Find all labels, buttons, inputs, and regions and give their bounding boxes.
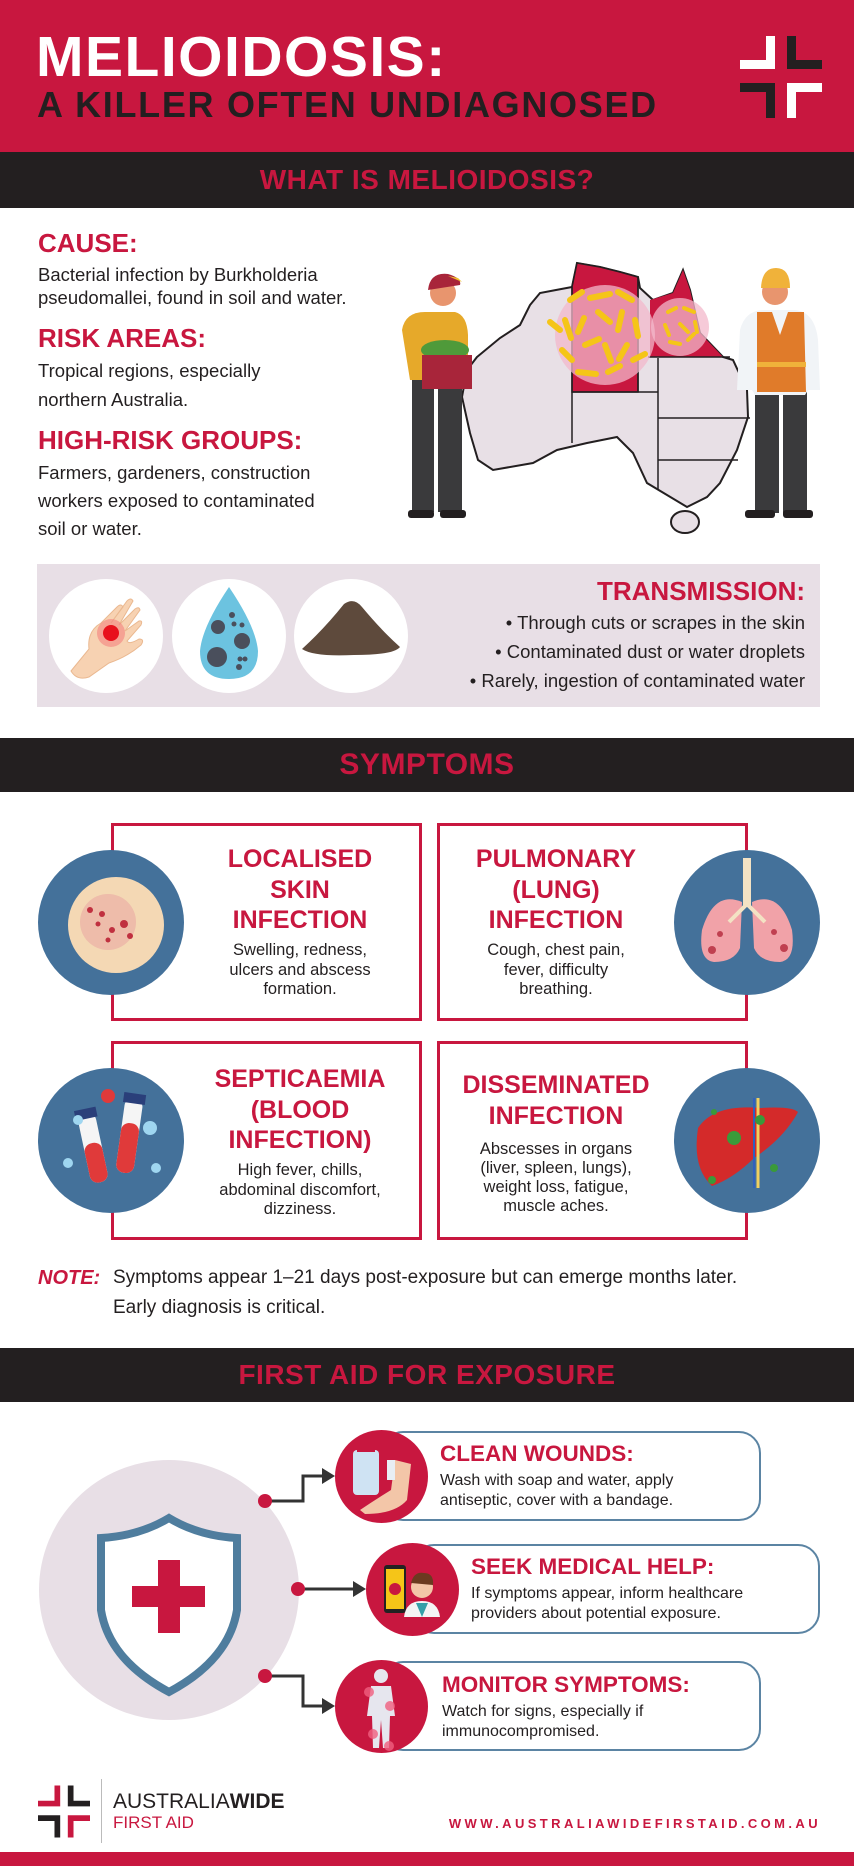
text: seek medical help: SEEK MEDICAL HELP:: [471, 1554, 714, 1579]
text: localised skin infection: SKIN: [270, 876, 330, 904]
text: pulmonary infection: PULMONARY: [476, 845, 636, 873]
icon: doctor and phone: [366, 1543, 459, 1636]
panel: disseminated infection: [437, 1041, 748, 1240]
icon: water drop with bacteria: [172, 579, 286, 693]
text: septicaemia: [215, 1065, 385, 1218]
text: septicaemia: High fever, chills,: [238, 1161, 362, 1179]
icon: soil pile: [294, 579, 408, 693]
text: clean wounds: CLEAN WOUNDS:: [440, 1441, 634, 1466]
bullet list: [470, 612, 805, 691]
icon: skin: [38, 850, 184, 995]
text: disseminated infection: INFECTION: [489, 1102, 623, 1130]
text: localised skin infection: [228, 845, 372, 998]
section heading: what is melioidosis: WHAT IS MELIOIDOSIS?: [260, 164, 594, 195]
text: disseminated infection: muscle aches.: [503, 1197, 609, 1215]
bottom bar: [0, 1852, 854, 1866]
text block: risk areas: northern Australia.: [38, 389, 188, 410]
icon: liver: [674, 1068, 820, 1213]
step card: clean wounds: [381, 1431, 761, 1521]
panel: localised skin infection: [111, 823, 422, 1021]
text: localised skin infection: LOCALISED: [228, 845, 372, 873]
panel: pulmonary infection: [437, 823, 748, 1021]
text: monitor symptoms: immunocompromised.: [442, 1722, 599, 1740]
icon: lungs: [674, 850, 820, 995]
text: pulmonary infection: [476, 845, 636, 998]
text block: high-risk groups: HIGH-RISK GROUPS:: [38, 425, 302, 455]
panel: transmission: [37, 564, 820, 707]
icon: wound care: [335, 1430, 428, 1523]
illustration: map of Australia with workers: [402, 262, 820, 534]
text: pulmonary infection: Cough, chest pain,: [487, 941, 625, 959]
text: septicaemia: INFECTION): [228, 1126, 372, 1154]
heading: transmission: TRANSMISSION:: [597, 576, 805, 606]
footer logo: AUSTRALIAWIDE: [113, 1790, 285, 1813]
text: localised skin infection: ulcers and abscess: [229, 960, 371, 978]
section heading: symptoms: [0, 738, 854, 792]
text: seek medical help: providers about potential exposure.: [471, 1604, 721, 1622]
section heading: what is melioidosis: [0, 152, 854, 208]
text: localised skin infection: Swelling, redness,: [233, 941, 367, 959]
note: [38, 1267, 737, 1318]
arrows connecting shield to steps: [258, 1468, 366, 1714]
text block: high-risk groups: soil or water.: [38, 518, 142, 539]
construction worker: [737, 268, 820, 518]
text: pulmonary infection: fever, difficulty: [504, 960, 608, 978]
text: septicaemia: SEPTICAEMIA: [215, 1065, 385, 1093]
footer logo: [38, 1779, 285, 1843]
text block: risk areas: Tropical regions, especially: [38, 360, 260, 381]
bullet list: • Rarely, ingestion of contaminated water: [470, 670, 805, 691]
text: disseminated infection: (liver, spleen, lungs),: [480, 1159, 632, 1177]
header banner: [0, 0, 854, 152]
text: monitor symptoms: MONITOR SYMPTOMS:: [442, 1672, 690, 1697]
text: septicaemia: (BLOOD: [251, 1096, 349, 1124]
text: seek medical help: [471, 1554, 743, 1622]
text: pulmonary infection: INFECTION: [489, 906, 623, 934]
step card: monitor symptoms: [381, 1661, 761, 1751]
logo mark: [740, 36, 822, 118]
text: disseminated infection: weight loss, fatigue,: [484, 1178, 628, 1196]
text: septicaemia: abdominal discomfort,: [219, 1180, 381, 1198]
text: disseminated infection: Abscesses in organs: [480, 1140, 632, 1158]
section heading: first aid for exposure: [0, 1348, 854, 1402]
text block: risk areas: RISK AREAS:: [38, 323, 206, 353]
text block: risk areas: [38, 323, 260, 410]
text: monitor symptoms: [442, 1672, 690, 1740]
text: clean wounds: antiseptic, cover with a bandage.: [440, 1492, 673, 1508]
note: Early diagnosis is critical.: [113, 1297, 325, 1318]
map: [462, 263, 750, 533]
note: NOTE:: [38, 1267, 100, 1289]
subtitle: A KILLER OFTEN UNDIAGNOSED: [37, 84, 658, 125]
text: disseminated infection: DISSEMINATED: [462, 1071, 650, 1099]
text block: cause: CAUSE:: [38, 228, 138, 258]
panel: septicaemia: [111, 1041, 422, 1240]
text: localised skin infection: formation.: [263, 980, 337, 998]
section heading: first aid for exposure: FIRST AID FOR EXPOSURE: [238, 1359, 616, 1390]
title: MELIOIDOSIS:: [36, 25, 447, 89]
farmer: [402, 274, 472, 518]
text: clean wounds: [440, 1441, 674, 1508]
text block: cause: Bacterial infection by Burkholderia: [38, 264, 318, 285]
section heading: symptoms: SYMPTOMS: [339, 748, 515, 781]
text block: high-risk groups: workers exposed to contaminated: [38, 490, 315, 511]
bullet list: • Contaminated dust or water droplets: [495, 641, 805, 662]
step card: seek medical help: [412, 1544, 820, 1634]
text: monitor symptoms: Watch for signs, especially if: [442, 1703, 643, 1720]
note: Symptoms appear 1–21 days post-exposure but can emerge months later.: [113, 1267, 737, 1288]
text: localised skin infection: INFECTION: [233, 906, 367, 934]
text: seek medical help: If symptoms appear, inform healthcare: [471, 1585, 743, 1602]
text: septicaemia: dizziness.: [264, 1200, 336, 1218]
text block: cause: [38, 228, 347, 308]
text block: high-risk groups: [38, 425, 315, 539]
footer logo: FIRST AID: [113, 1813, 194, 1832]
text: pulmonary infection: breathing.: [519, 980, 593, 998]
bullet list: • Through cuts or scrapes in the skin: [506, 612, 805, 633]
text block: high-risk groups: Farmers, gardeners, construction: [38, 462, 310, 483]
text: clean wounds: Wash with soap and water, apply: [440, 1472, 673, 1489]
icon: hand with wound: [49, 579, 163, 693]
shield graphic: [39, 1460, 299, 1720]
text block: cause: pseudomallei, found in soil and water.: [38, 287, 347, 308]
text: pulmonary infection: (LUNG): [512, 876, 600, 904]
icon: body with pain points: [335, 1660, 428, 1753]
text: disseminated infection: [462, 1071, 650, 1215]
icon: blood tubes: [38, 1068, 184, 1213]
website url: WWW.AUSTRALIAWIDEFIRSTAID.COM.AU: [449, 1816, 821, 1831]
